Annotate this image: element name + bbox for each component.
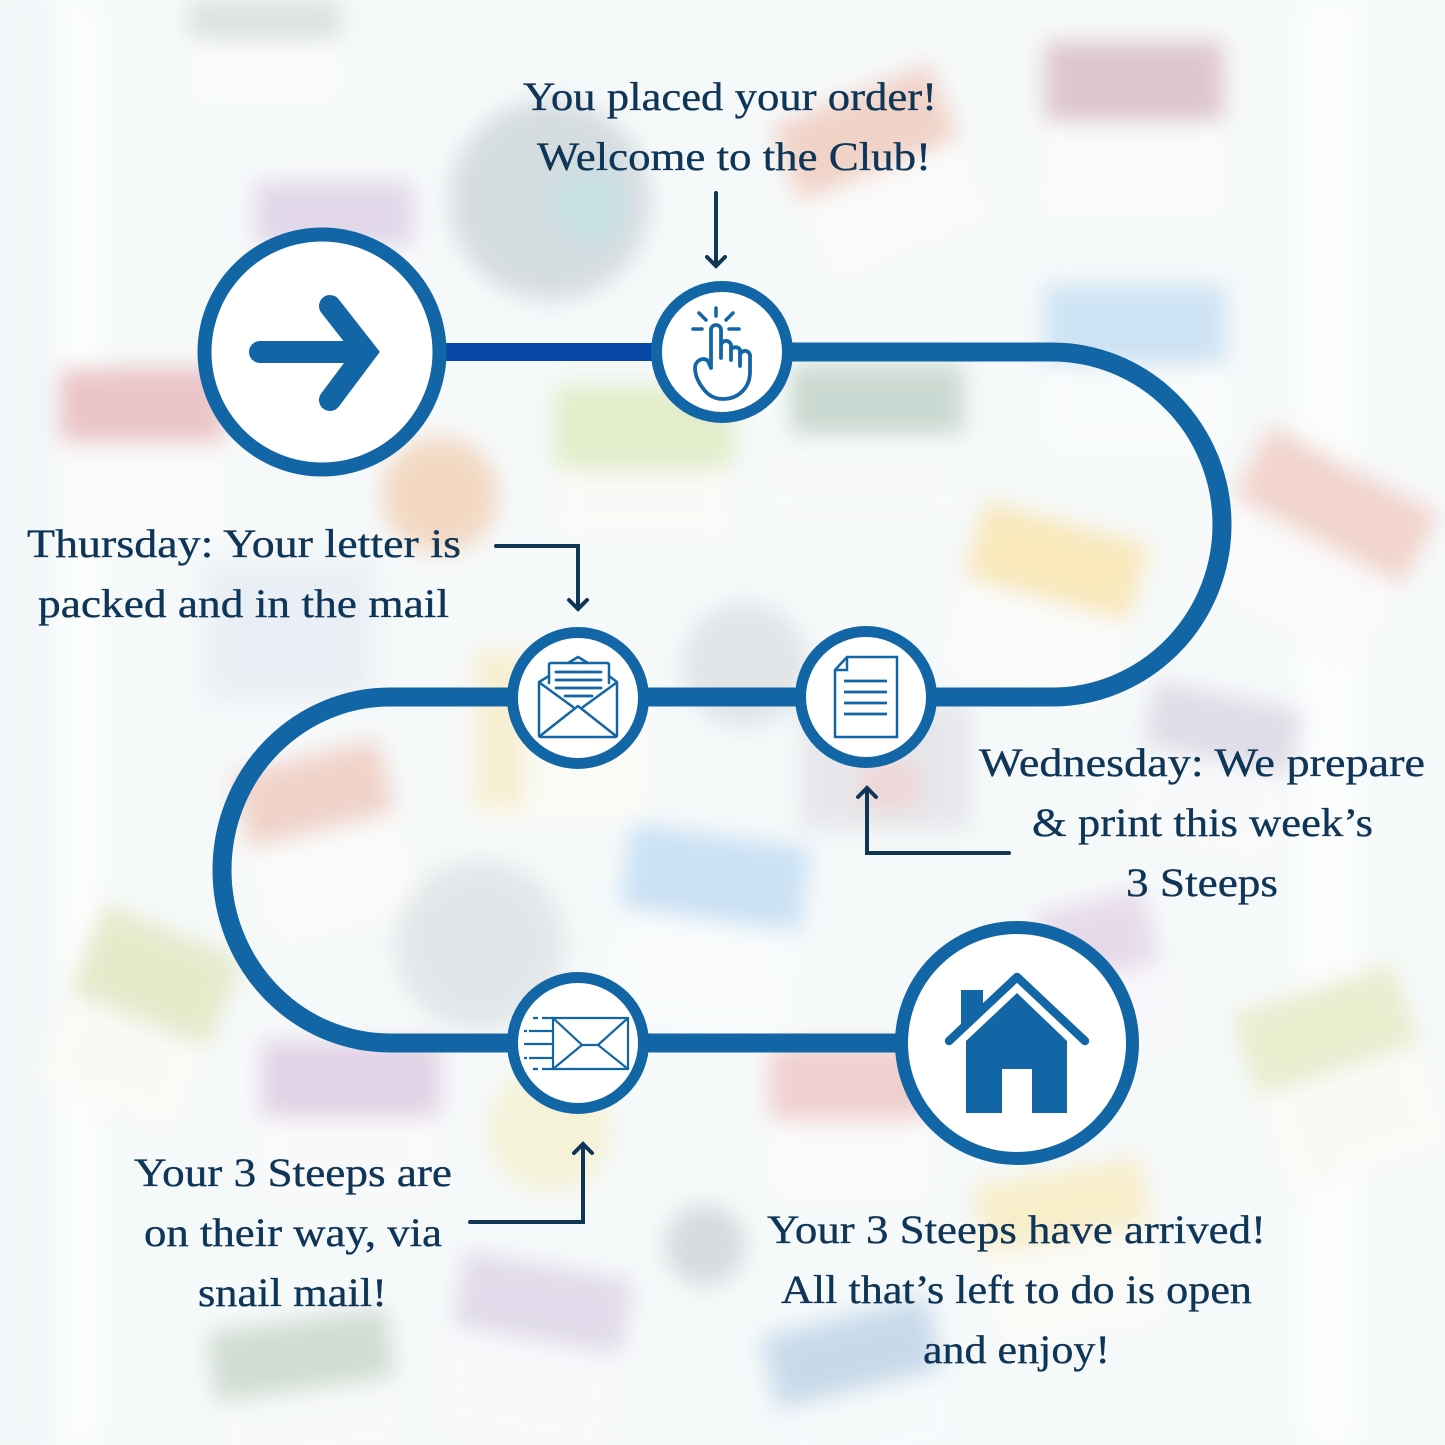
text: on their way: Your 3 Steeps are — [134, 1150, 452, 1195]
icon: fast envelope — [512, 978, 644, 1108]
text: Wednesday: Wednesday: We prepare — [979, 740, 1425, 785]
text: order placed — [523, 74, 937, 179]
text: Thursday: Thursday: Your letter is — [27, 521, 461, 566]
text: order placed: Welcome to the Club! — [537, 134, 931, 179]
arrow: Thursday to envelope — [496, 546, 587, 609]
text: Thursday: packed and in the mail — [38, 581, 449, 626]
text: Wednesday: & print this week’s — [1032, 800, 1373, 845]
text: on their way: snail mail! — [198, 1270, 387, 1315]
start circle with arrow icon — [204, 234, 440, 470]
arrow: Wednesday to document — [858, 788, 1009, 853]
text: Thursday — [27, 521, 461, 626]
icon: open envelope with letter — [512, 632, 644, 764]
text: arrived: Your 3 Steeps have arrived! — [767, 1207, 1266, 1252]
icon: clicking hand — [656, 286, 788, 418]
text: arrived: and enjoy! — [923, 1327, 1110, 1372]
arrow: snail mail to fast envelope — [470, 1144, 592, 1222]
timeline path — [222, 343, 1222, 1043]
text: arrived: All that’s left to do is open — [781, 1267, 1252, 1312]
text: arrived — [767, 1207, 1266, 1372]
text: Wednesday: 3 Steeps — [1126, 860, 1278, 905]
text: Wednesday — [979, 740, 1425, 905]
icon: document — [800, 632, 932, 762]
icon: home — [902, 928, 1132, 1158]
text: order placed: You placed your order! — [523, 74, 937, 119]
text: on their way: on their way, via — [144, 1210, 442, 1255]
text: on their way — [134, 1150, 452, 1315]
arrow: order to click icon — [707, 193, 725, 266]
